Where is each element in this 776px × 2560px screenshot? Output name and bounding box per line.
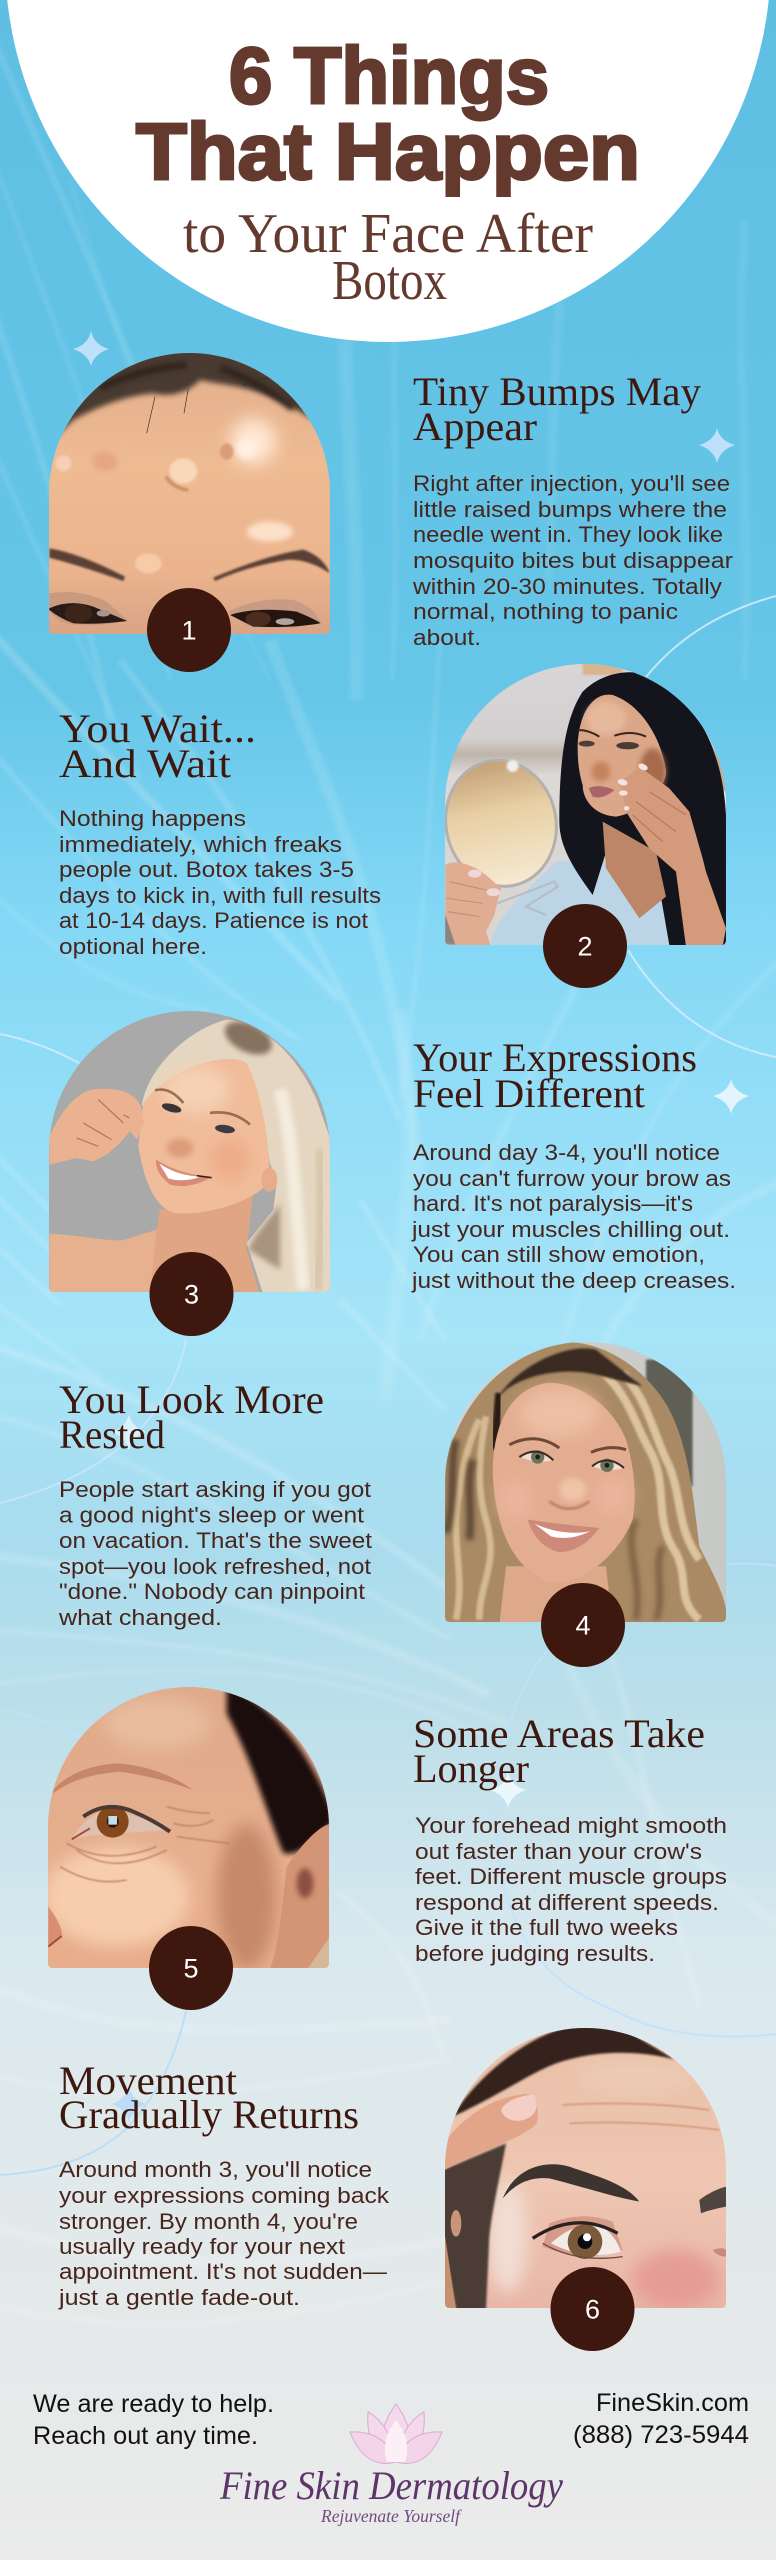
body text: just your muscles chilling out. bbox=[411, 1217, 730, 1242]
body text bbox=[58, 2157, 390, 2310]
body text: on vacation. That's the sweet bbox=[59, 1528, 372, 1553]
logo wordmark: Rejuvenate Yourself bbox=[320, 2506, 463, 2526]
heading bbox=[59, 706, 256, 786]
heading: Movement bbox=[59, 2058, 237, 2103]
photo: close-up of crow's feet bbox=[48, 1687, 329, 1968]
body text: hard. It's not paralysis—it's bbox=[413, 1191, 693, 1216]
heading: Some Areas Take bbox=[413, 1711, 705, 1756]
panel: step 3 expressions bbox=[40, 1003, 736, 1336]
header circle bbox=[5, 0, 771, 342]
icon: lotus logo bbox=[350, 2404, 442, 2463]
body text: about. bbox=[413, 625, 481, 650]
subtitle: Botox bbox=[332, 250, 447, 312]
footer contact details: FineSkin.com bbox=[596, 2389, 749, 2417]
photo: smiling blonde woman bbox=[49, 1011, 330, 1292]
heading: Your Expressions bbox=[413, 1035, 697, 1080]
body text: little raised bumps where the bbox=[413, 497, 727, 522]
body text: Around month 3, you'll notice bbox=[59, 2157, 372, 2182]
body text bbox=[415, 1813, 727, 1966]
body text: feet. Different muscle groups bbox=[415, 1864, 727, 1889]
heading: Appear bbox=[413, 404, 537, 449]
badge 3 bbox=[150, 1252, 234, 1336]
title: That Happen bbox=[136, 107, 640, 196]
body text: Give it the full two weeks bbox=[415, 1915, 678, 1940]
panel: step 4 rested bbox=[58, 1333, 736, 1667]
badge 5 bbox=[149, 1926, 233, 2010]
body text: just a gentle fade-out. bbox=[58, 2285, 300, 2310]
badge 6: 6 bbox=[585, 2294, 600, 2324]
panel: step 1 tiny bumps bbox=[40, 345, 733, 672]
body text bbox=[411, 1140, 736, 1293]
photo: finger on forehead wrinkles bbox=[445, 2028, 726, 2308]
footer call to action bbox=[33, 2390, 274, 2450]
heading bbox=[59, 2058, 359, 2137]
body text: needle went in. They look like bbox=[413, 522, 723, 547]
body text: Right after injection, you'll see bbox=[413, 471, 730, 496]
body text: before judging results. bbox=[415, 1941, 655, 1966]
badge 3: 3 bbox=[184, 1280, 199, 1310]
heading bbox=[413, 1711, 705, 1791]
body text: usually ready for your next bbox=[59, 2234, 345, 2259]
body text: immediately, which freaks bbox=[59, 832, 342, 857]
body text: you can't furrow your brow as bbox=[413, 1166, 731, 1191]
body text: just without the deep creases. bbox=[411, 1268, 736, 1293]
footer contact details bbox=[573, 2389, 749, 2449]
badge 2 bbox=[543, 904, 627, 988]
photo: smiling woman with wavy hair bbox=[445, 1342, 726, 1622]
panel: step 6 movement bbox=[58, 2020, 736, 2351]
heading: Tiny Bumps May bbox=[413, 369, 701, 414]
body text: You can still show emotion, bbox=[413, 1242, 705, 1267]
body text: mosquito bites but disappear bbox=[413, 548, 733, 573]
body text: Around day 3-4, you'll notice bbox=[413, 1140, 720, 1165]
decorative arc lines bbox=[0, 596, 776, 2175]
subtitle bbox=[183, 203, 593, 312]
body text: within 20-30 minutes. Totally bbox=[412, 574, 722, 599]
badge 4 bbox=[541, 1583, 625, 1667]
badge 6 bbox=[550, 2267, 634, 2351]
badge 2: 2 bbox=[577, 932, 593, 962]
body text bbox=[412, 471, 733, 650]
footer contact details: (888) 723-5944 bbox=[573, 2421, 749, 2449]
body text: Nothing happens bbox=[59, 806, 246, 831]
title: 6 Things bbox=[229, 31, 549, 120]
sparkle icons bbox=[73, 331, 749, 2122]
badge 1: 1 bbox=[181, 616, 197, 646]
heading: Rested bbox=[59, 1412, 165, 1457]
footer call to action: We are ready to help. bbox=[33, 2390, 274, 2418]
body text: People start asking if you got bbox=[59, 1477, 371, 1502]
panel: step 2 you wait bbox=[59, 655, 736, 988]
body text: days to kick in, with full results bbox=[59, 883, 381, 908]
body text: optional here. bbox=[59, 934, 207, 959]
logo wordmark: Fine Skin Dermatology bbox=[219, 2463, 563, 2508]
heading: Longer bbox=[413, 1746, 529, 1791]
body text: Your forehead might smooth bbox=[415, 1813, 727, 1838]
badge 4: 4 bbox=[575, 1610, 591, 1640]
body text: your expressions coming back bbox=[59, 2183, 390, 2208]
body text: out faster than your crow's bbox=[415, 1839, 702, 1864]
body text: normal, nothing to panic bbox=[413, 599, 678, 624]
body text: spot—you look refreshed, not bbox=[59, 1554, 371, 1579]
title bbox=[136, 31, 640, 196]
heading: You Look More bbox=[59, 1377, 324, 1422]
logo wordmark bbox=[219, 2463, 563, 2526]
body text bbox=[59, 806, 381, 959]
heading bbox=[413, 1035, 697, 1116]
badge 5: 5 bbox=[183, 1954, 199, 1984]
badge 1 bbox=[147, 588, 231, 672]
heading bbox=[59, 1377, 324, 1457]
heading: Gradually Returns bbox=[59, 2092, 359, 2137]
heading bbox=[413, 369, 701, 449]
body text bbox=[58, 1477, 372, 1630]
body text: stronger. By month 4, you're bbox=[59, 2209, 358, 2234]
heading: And Wait bbox=[59, 741, 231, 786]
body text: appointment. It's not sudden— bbox=[59, 2259, 387, 2284]
body text: at 10-14 days. Patience is not bbox=[59, 908, 368, 933]
heading: Feel Different bbox=[413, 1071, 645, 1116]
body text: "done." Nobody can pinpoint bbox=[59, 1579, 365, 1604]
subtitle: to Your Face After bbox=[183, 203, 593, 265]
body text: what changed. bbox=[58, 1605, 222, 1630]
photo: forehead with bumps bbox=[49, 353, 330, 634]
body text: people out. Botox takes 3-5 bbox=[59, 857, 354, 882]
footer call to action: Reach out any time. bbox=[33, 2422, 258, 2450]
photo: woman with mirror bbox=[445, 664, 726, 945]
body text: respond at different speeds. bbox=[415, 1890, 719, 1915]
panel: step 5 some areas bbox=[40, 1680, 727, 2010]
body text: a good night's sleep or went bbox=[59, 1502, 364, 1528]
heading: You Wait... bbox=[59, 706, 256, 751]
